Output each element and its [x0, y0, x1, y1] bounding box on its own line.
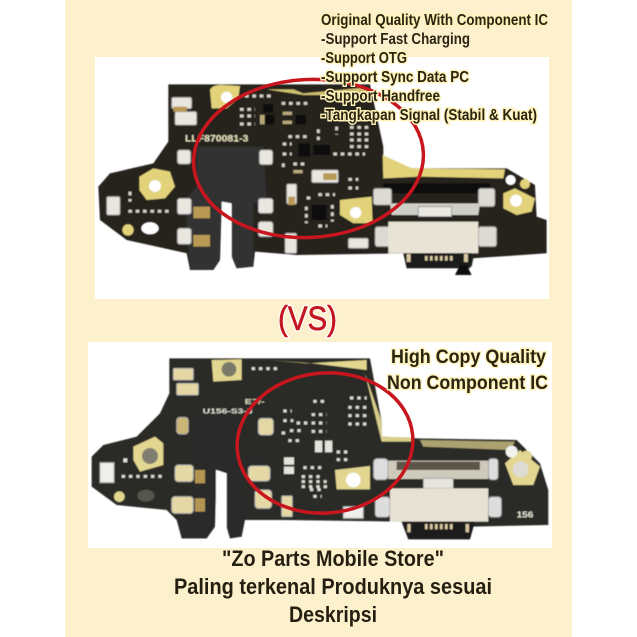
VS label: (VS): [278, 300, 337, 338]
USB-C connector: [373, 183, 497, 275]
silver double pads: [123, 441, 332, 474]
text block: original features: -Tangkapan Signal (Stabil & Kuat): [321, 107, 537, 124]
small components: [128, 96, 368, 226]
text block: original features: -Support Handfree: [321, 88, 440, 105]
background panel: [65, 0, 572, 637]
text: high copy label: Non Component IC: [387, 373, 548, 394]
text block: original features: -Support OTG: [321, 50, 407, 67]
footer store text: Paling terkenal Produknya sesuai: [174, 574, 492, 599]
connector assembly: [373, 458, 502, 539]
panel: original board photo: [95, 57, 549, 299]
copy PCB outline: [92, 358, 548, 539]
text: high copy label: Non Component IC: [387, 373, 548, 394]
empty pads: [122, 369, 368, 496]
text: high copy label: High Copy Quality: [391, 347, 546, 368]
text: high copy label: High Copy Quality: [391, 347, 546, 368]
red highlight ellipse: [190, 74, 427, 243]
footer store text: [174, 546, 492, 627]
gold traces: [122, 85, 535, 236]
silkscreen labels: U156-S3-3: [203, 406, 253, 415]
text block: original features: -Support Sync Data PC: [321, 69, 469, 86]
audio jack: [185, 147, 267, 270]
audio jack: [177, 415, 267, 538]
text block: original features: Original Quality With Component IC: [321, 12, 548, 29]
footer store text: "Zo Parts Mobile Store": [222, 546, 444, 571]
VS label: (VS): [278, 300, 337, 338]
panel: high copy board photo: E7/-: [245, 397, 265, 406]
silver tabs: [107, 97, 368, 253]
red highlight ellipse: [231, 366, 419, 520]
panel: high copy board photo: [88, 342, 552, 548]
text block: original features: -Tangkapan Signal (Stabil & Kuat): [321, 107, 537, 124]
text block: original features: -Support Handfree: [321, 88, 440, 105]
gold clips: [173, 107, 337, 247]
holes: [141, 92, 522, 234]
holes: [137, 362, 529, 502]
text block: original features: [321, 12, 548, 124]
text block: original features: -Support Fast Charging: [321, 31, 470, 48]
gold clips: [195, 470, 205, 512]
text: high copy label: [387, 347, 548, 394]
original PCB outline: [98, 84, 547, 270]
text block: original features: -Support OTG: [321, 50, 407, 67]
small gold-toned parts: [260, 112, 303, 173]
footer store text: Deskripsi: [289, 602, 377, 627]
silkscreen label: LLF870081-3: [185, 134, 248, 144]
gold pads: [100, 368, 363, 518]
panel: high copy board photo: 156: [517, 511, 534, 520]
text block: original features: -Support Sync Data PC: [321, 69, 469, 86]
chips: [263, 104, 330, 220]
gold traces: [114, 359, 540, 502]
text block: original features: Original Quality With Component IC: [321, 12, 548, 29]
